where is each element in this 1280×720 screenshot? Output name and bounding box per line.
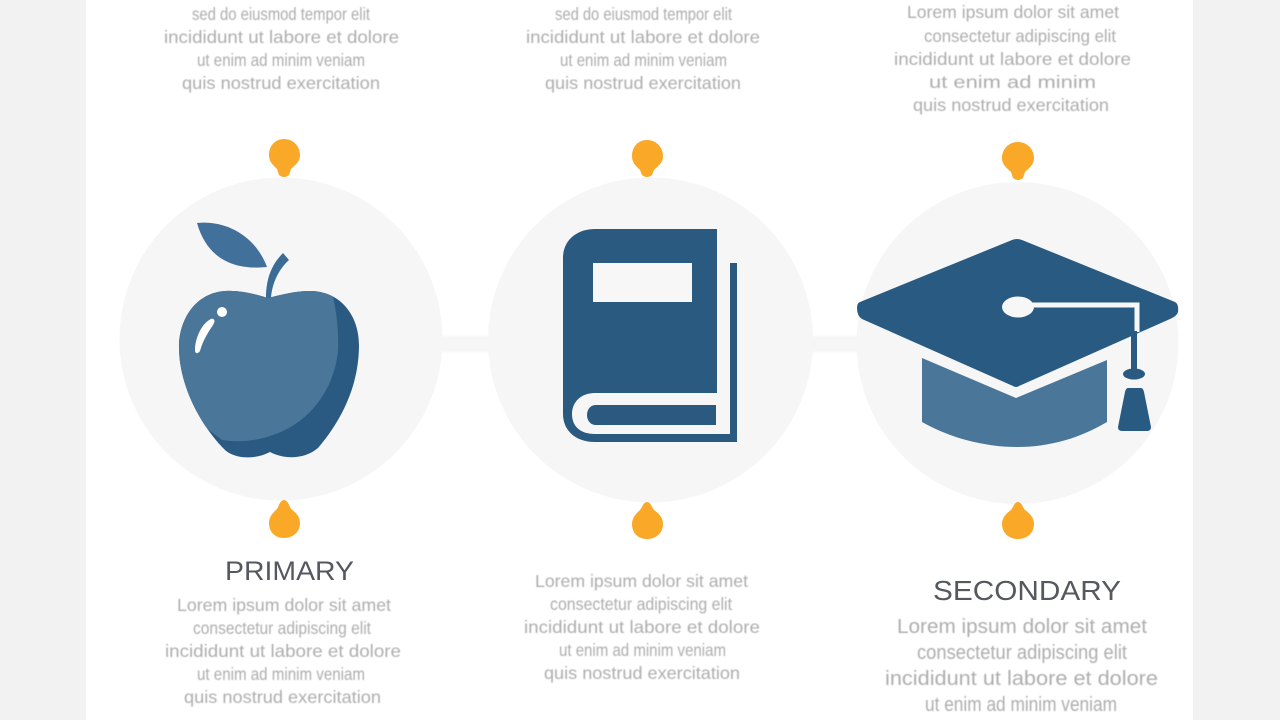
- text block: top middle: [526, 4, 760, 93]
- text block: middle: incididunt ut labore et dolore: [524, 617, 760, 637]
- panel: primary circle: [120, 178, 442, 500]
- text block: primary: consectetur adipiscing elit: [193, 618, 371, 638]
- text block: top right: incididunt ut labore et dolore: [894, 49, 1131, 69]
- text block: top left: sed do eiusmod tempor elit: [192, 4, 370, 24]
- text block: top middle: quis nostrud exercitation: [545, 73, 741, 93]
- text block: middle: Lorem ipsum dolor sit amet: [535, 571, 748, 591]
- icon: apple: [170, 223, 359, 457]
- text block: middle: consectetur adipiscing elit: [550, 594, 732, 614]
- panel: middle circle: [488, 178, 813, 502]
- text block: top middle: incididunt ut labore et dolore: [526, 27, 760, 47]
- icon: pin primary top: [269, 139, 300, 177]
- icon: pin secondary bottom: [1002, 502, 1034, 539]
- text block: primary: [165, 595, 401, 707]
- icon: pin middle bottom: [632, 502, 663, 539]
- heading: secondary: SECONDARY: [933, 575, 1121, 606]
- panel: secondary circle: [856, 182, 1178, 504]
- text block: secondary: ut enim ad minim veniam: [925, 694, 1117, 716]
- text block: top left: [164, 4, 399, 93]
- text block: secondary: consectetur adipiscing elit: [917, 642, 1127, 664]
- text block: middle: ut enim ad minim veniam: [559, 640, 726, 660]
- connector lines: [438, 336, 859, 352]
- text block: primary: ut enim ad minim veniam: [197, 664, 365, 684]
- text block: top right: [894, 2, 1131, 115]
- text block: top right: consectetur adipiscing elit: [924, 26, 1116, 46]
- text block: middle: quis nostrud exercitation: [544, 663, 740, 683]
- icon: graduation cap: [857, 239, 1178, 447]
- icon: pin middle top: [632, 140, 663, 177]
- text block: primary: Lorem ipsum dolor sit amet: [177, 595, 391, 615]
- icon: pin primary bottom: [269, 500, 300, 538]
- text block: top left: quis nostrud exercitation: [182, 73, 380, 93]
- text block: top middle: sed do eiusmod tempor elit: [555, 4, 732, 24]
- text block: middle: [524, 571, 760, 683]
- heading: primary: PRIMARY: [225, 556, 354, 586]
- icon: book: [563, 229, 737, 442]
- text block: primary: quis nostrud exercitation: [184, 687, 381, 707]
- text block: top middle: ut enim ad minim veniam: [560, 50, 727, 70]
- text block: secondary: Lorem ipsum dolor sit amet: [897, 616, 1147, 638]
- text block: top right: quis nostrud exercitation: [913, 95, 1109, 115]
- text block: top left: incididunt ut labore et dolore: [164, 27, 399, 47]
- text block: secondary: [885, 616, 1158, 716]
- text block: secondary: incididunt ut labore et dolore: [885, 668, 1158, 690]
- text block: top right: ut enim ad minim: [929, 72, 1096, 92]
- text block: top left: ut enim ad minim veniam: [197, 50, 365, 70]
- text block: top right: Lorem ipsum dolor sit amet: [907, 2, 1119, 22]
- text block: primary: incididunt ut labore et dolore: [165, 641, 401, 661]
- icon: pin secondary top: [1002, 142, 1034, 180]
